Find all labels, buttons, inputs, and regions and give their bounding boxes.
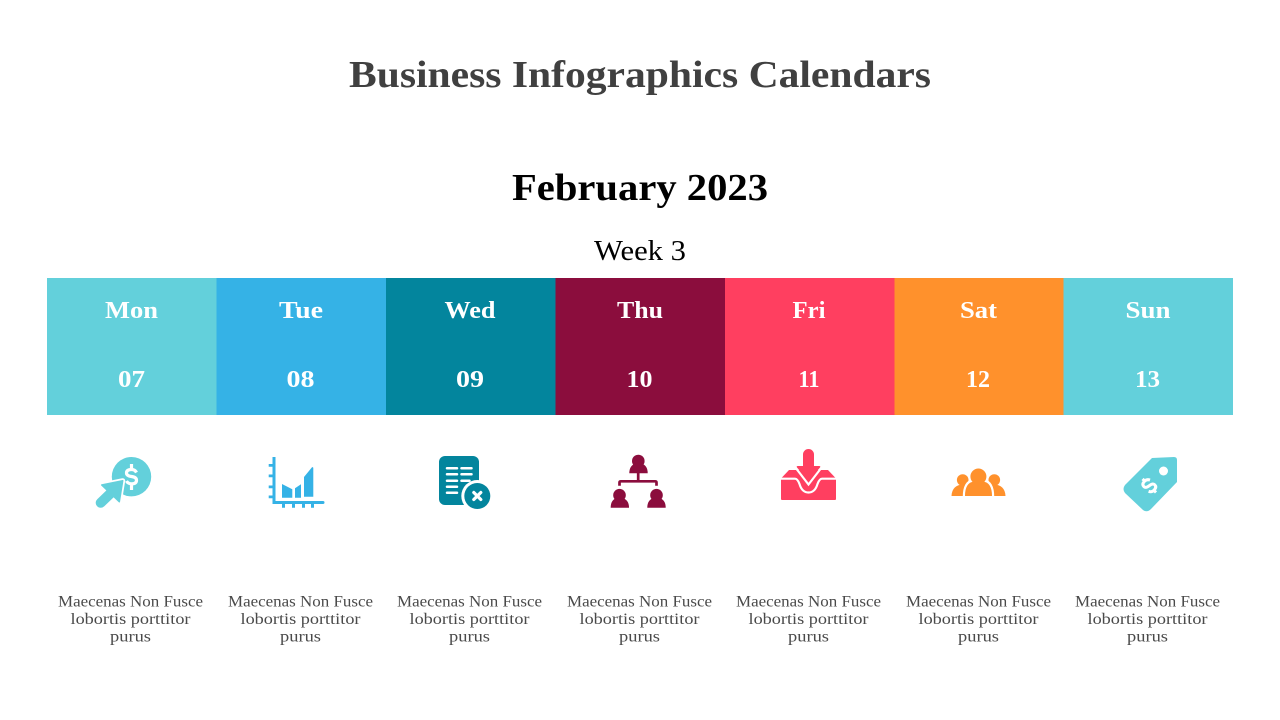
- day: Saturday: [894, 278, 1064, 415]
- description: Tuesday: [228, 594, 373, 646]
- day: Sunday: 13: [1135, 367, 1160, 393]
- description: Sunday: purus: [1127, 628, 1168, 646]
- icon: document with cross: [439, 456, 493, 512]
- description: Wednesday: purus: [449, 628, 490, 646]
- description: Friday: purus: [788, 628, 829, 646]
- day: Wednesday: 09: [456, 367, 484, 393]
- day: Monday: 07: [118, 367, 145, 393]
- description: Saturday: Maecenas Non Fusce: [906, 594, 1051, 610]
- icon: dollar coin with arrow: [101, 457, 151, 503]
- day: Tuesday: Tue: [279, 298, 323, 324]
- day: Wednesday: [386, 278, 556, 415]
- description: Wednesday: lobortis porttitor: [410, 611, 530, 628]
- day: Sunday: Sun: [1126, 298, 1170, 324]
- description: Sunday: Maecenas Non Fusce: [1075, 594, 1220, 610]
- description: Tuesday: purus: [280, 628, 321, 646]
- description: Tuesday: Maecenas Non Fusce: [228, 594, 373, 610]
- day: Monday: [47, 278, 216, 415]
- description: Monday: [58, 594, 203, 646]
- day: Saturday: 12: [966, 367, 990, 393]
- description: Sunday: [1075, 594, 1220, 646]
- day: Tuesday: 08: [286, 367, 314, 393]
- day: Thursday: 10: [626, 367, 652, 393]
- calendar strip: [47, 278, 1233, 415]
- month heading: February 2023: [512, 167, 768, 209]
- description: Saturday: [906, 594, 1051, 646]
- icon: inbox download: [781, 449, 836, 500]
- description: Wednesday: Maecenas Non Fusce: [397, 594, 542, 610]
- day: Wednesday: Wed: [444, 298, 496, 324]
- description: Friday: [736, 594, 881, 646]
- description: Wednesday: [397, 594, 542, 646]
- description: Monday: purus: [110, 628, 151, 646]
- description: Friday: Maecenas Non Fusce: [736, 594, 881, 610]
- icon: price tag: [1124, 457, 1177, 511]
- description: Thursday: Maecenas Non Fusce: [567, 594, 712, 610]
- day: Thursday: Thu: [617, 298, 663, 324]
- day: Friday: [725, 278, 894, 415]
- day: Saturday: Sat: [960, 298, 997, 324]
- day: Friday: 11: [798, 367, 820, 393]
- icon: group of people: [952, 467, 1006, 497]
- week label: Week 3: [594, 236, 686, 267]
- description: Monday: lobortis porttitor: [70, 611, 191, 628]
- day: Friday: Fri: [792, 298, 826, 324]
- icon: bar chart: [269, 457, 324, 508]
- description: Monday: Maecenas Non Fusce: [58, 594, 203, 610]
- description: Thursday: purus: [619, 628, 660, 646]
- description: Tuesday: lobortis porttitor: [240, 611, 361, 628]
- description: Saturday: purus: [958, 628, 999, 646]
- day: Sunday: [1064, 278, 1233, 415]
- description: Thursday: lobortis porttitor: [580, 611, 700, 628]
- day: Tuesday: [216, 278, 386, 415]
- description: Saturday: lobortis porttitor: [918, 611, 1039, 628]
- description: Friday: lobortis porttitor: [748, 611, 869, 628]
- day: Thursday: [556, 278, 725, 415]
- day: Monday: Mon: [105, 298, 158, 324]
- title: Business Infographics Calendars: [349, 54, 931, 96]
- description: Sunday: lobortis porttitor: [1088, 611, 1208, 628]
- description: Thursday: [567, 594, 712, 646]
- icon: team hierarchy: [611, 455, 666, 508]
